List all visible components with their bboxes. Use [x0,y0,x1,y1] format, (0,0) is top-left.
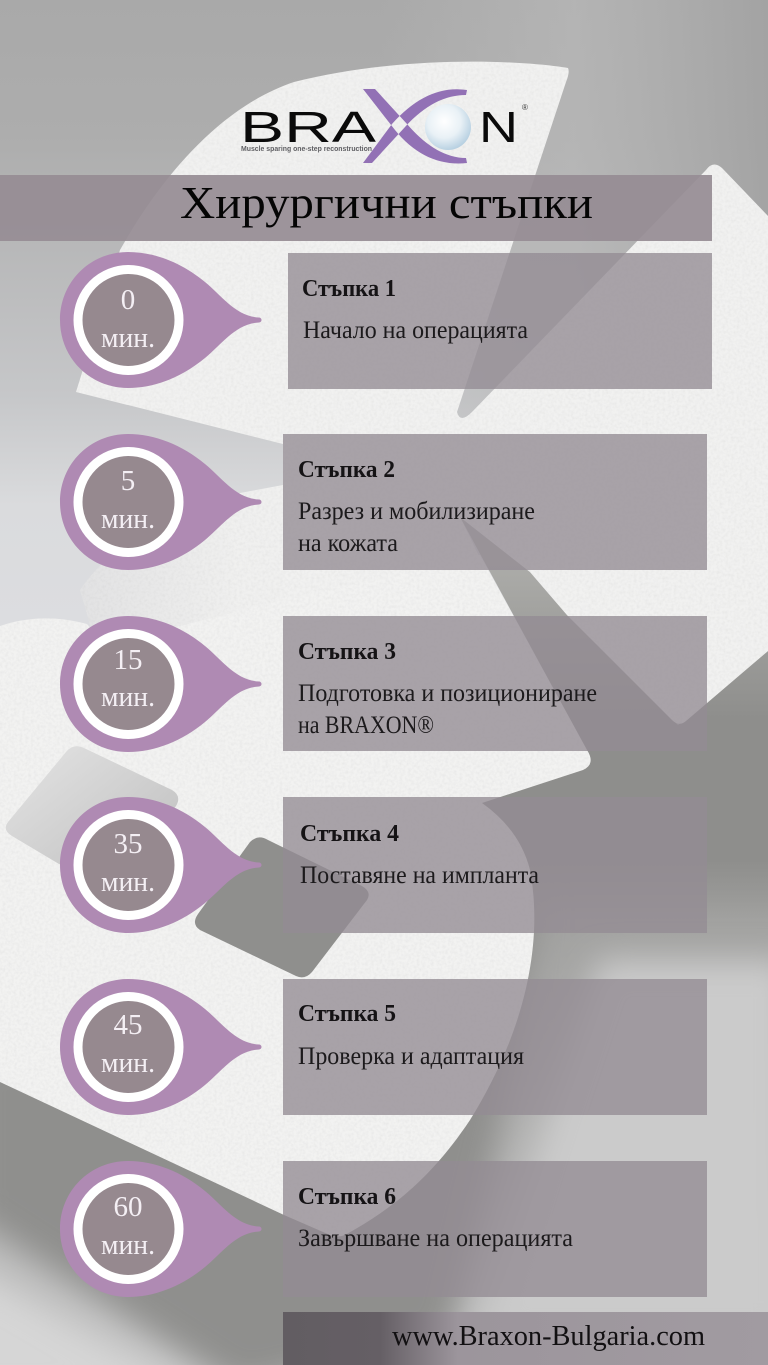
teardrop marker: 45 min: 45 [114,1009,142,1041]
step 3 [60,616,707,752]
teardrop marker: 60 min [60,1161,262,1297]
panel: step 5: Проверка и адаптация [298,1043,524,1070]
teardrop marker: 0 min: мин. [101,322,155,354]
title band [0,175,712,241]
logo [240,89,528,163]
teardrop marker: 5 min [60,434,262,570]
mesh: small light square [6,746,178,880]
logo: tagline: Muscle sparing one-step reconstruction [241,146,372,153]
footer band [283,1312,768,1365]
website link: www.Braxon-Bulgaria.com [392,1320,705,1352]
panel: step 4 [283,797,707,933]
logo: purple X [363,89,467,163]
teardrop marker: 5 min: мин. [101,503,155,535]
teardrop marker: 60 min: мин. [101,1229,155,1261]
logo: registered mark: ® [522,103,528,112]
panel: step 5: Стъпка 5 [298,1001,396,1027]
panel: step 3: на BRAXON® [298,712,434,739]
teardrop marker: 60 min: 60 [114,1191,142,1223]
panel: step 2: Стъпка 2 [298,457,395,483]
panel: step 3: Подготовка и позициониране [298,680,597,707]
logo: BRA letters: BRA [240,103,377,152]
panel: step 1 [288,253,712,389]
panel: step 6: Стъпка 6 [298,1184,396,1210]
title: Хирургични стъпки [180,177,593,228]
panel: step 3 [283,616,707,751]
logo: sphere [425,104,471,150]
step 4 [60,797,707,933]
mesh: small dark square [195,837,369,977]
logo: N letter: N [479,103,518,152]
shadow regions [0,900,768,1365]
teardrop marker: 0 min [60,252,262,388]
teardrop marker: 35 min: 35 [114,828,142,860]
step 5 [60,979,707,1115]
panel: step 2: на кожата [298,530,398,557]
teardrop marker: 35 min: мин. [101,866,155,898]
teardrop marker: 15 min: 15 [114,644,142,676]
teardrop marker: 0 min: 0 [121,284,135,316]
teardrop marker: 15 min [60,616,262,752]
panel: step 6 [283,1161,707,1297]
teardrop marker: 45 min: мин. [101,1047,155,1079]
step 1 [60,252,712,389]
wedge: lower gap [460,517,768,920]
teardrop marker: 45 min [60,979,262,1115]
panel: step 2: Разрез и мобилизиране [298,498,535,525]
teardrop marker: 5 min: 5 [121,465,135,497]
panel: step 4: Стъпка 4 [300,821,399,847]
panel: step 6: Завършване на операцията [298,1225,573,1252]
mesh: upper disc with wedge cut [76,62,768,724]
panel: step 2 [283,434,707,570]
panel: step 1: Начало на операцията [303,317,528,344]
panel: step 3: Стъпка 3 [298,639,396,665]
panel: step 4: Поставяне на импланта [300,862,539,889]
teardrop marker: 35 min [60,797,262,933]
panel: step 5 [283,979,707,1115]
panel: step 1: Стъпка 1 [302,276,396,302]
step 2 [60,434,707,570]
teardrop marker: 15 min: мин. [101,681,155,713]
mesh: lower shape [0,555,591,1236]
step 6 [60,1161,707,1297]
